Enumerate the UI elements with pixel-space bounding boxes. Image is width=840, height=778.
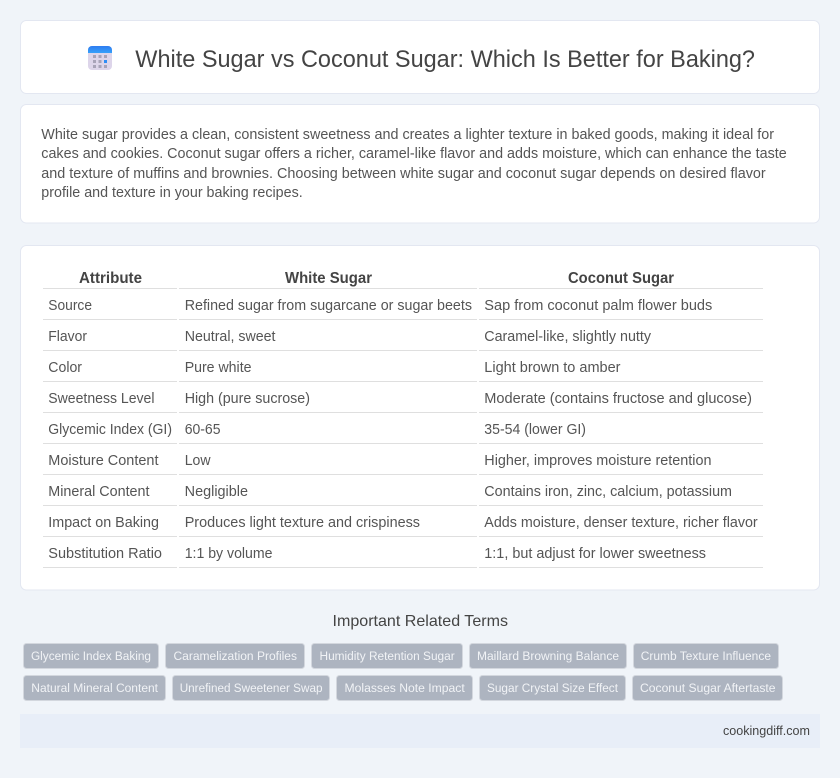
table row: flavor: [48, 329, 652, 345]
text block: introduction paragraph: [41, 127, 787, 201]
table row: impact on baking: Impact on Baking: [48, 515, 159, 531]
tag: unrefined sweetener swap: [172, 676, 330, 700]
table row: source: [48, 298, 712, 314]
table row: sweetness level: Moderate (contains fructose and glucose): [484, 391, 752, 407]
tag: coconut sugar aftertaste: Coconut Sugar Aftertaste: [640, 681, 776, 695]
table header row: Attribute: [79, 270, 142, 287]
table row: color: Color: [48, 360, 82, 376]
table row: substitution ratio: 1:1, but adjust for lower sweetness: [484, 546, 706, 562]
tag: crumb texture influence: Crumb Texture Influence: [641, 649, 771, 663]
table row: impact on baking: Produces light texture and crispiness: [185, 515, 420, 531]
table row: glycemic index: 35-54 (lower GI): [484, 422, 586, 438]
table row: source: Sap from coconut palm flower buds: [484, 298, 712, 314]
heading: important related terms: Important Related Terms: [332, 613, 508, 630]
footer source text: cookingdiff.com: [723, 723, 810, 738]
table row: impact on baking: [48, 515, 758, 531]
panel: related term tags: [24, 644, 782, 700]
tag: humidity retention sugar: [312, 644, 462, 668]
table header row: White Sugar: [285, 270, 372, 287]
text block: introduction paragraph: and texture of muffins and brownies. Choosing between white sugar and coconut sugar depends on desired flavor: [41, 166, 766, 182]
table row: color: [48, 360, 621, 376]
tag: maillard browning balance: Maillard Browning Balance: [477, 649, 619, 663]
table row: substitution ratio: 1:1 by volume: [185, 546, 272, 562]
table row: source: Refined sugar from sugarcane or sugar beets: [185, 298, 472, 314]
table row: glycemic index: 60-65: [185, 422, 220, 438]
tag: glycemic index baking: Glycemic Index Baking: [31, 649, 151, 663]
text block: introduction paragraph: cakes and cookies. Coconut sugar offers a richer, caramel-like flavor and adds moisture, which can enhance the taste: [41, 146, 787, 162]
table row: mineral content: Contains iron, zinc, calcium, potassium: [484, 484, 732, 500]
table row: mineral content: [48, 484, 732, 500]
table row: mineral content: Mineral Content: [48, 484, 149, 500]
tag: coconut sugar aftertaste: [632, 676, 782, 700]
table row: substitution ratio: [48, 546, 706, 562]
table row: moisture content: [48, 453, 712, 469]
icon: calendar: [88, 46, 112, 70]
text block: introduction paragraph: profile and texture in your baking recipes.: [41, 185, 303, 201]
text block: introduction paragraph: White sugar provides a clean, consistent sweetness and creates a lighter texture in baked goods, making it ideal for: [41, 127, 774, 143]
tag: unrefined sweetener swap: Unrefined Sweetener Swap: [180, 681, 323, 695]
table header row: Coconut Sugar: [568, 270, 674, 287]
table row: substitution ratio: Substitution Ratio: [48, 546, 162, 562]
tag: sugar crystal size effect: Sugar Crystal Size Effect: [487, 681, 619, 695]
table row: impact on baking: Adds moisture, denser texture, richer flavor: [484, 515, 758, 531]
table row: sweetness level: Sweetness Level: [48, 391, 154, 407]
panel: comparison table: [20, 246, 820, 590]
table row: sweetness level: High (pure sucrose): [185, 391, 310, 407]
tag: molasses note impact: Molasses Note Impact: [344, 681, 465, 695]
table row: moisture content: Higher, improves moisture retention: [484, 453, 712, 469]
tag: caramelization profiles: Caramelization Profiles: [174, 649, 297, 663]
table row: color: Pure white: [185, 360, 252, 376]
table row: moisture content: Low: [185, 453, 211, 469]
table header row: [79, 270, 674, 287]
panel: introduction: [20, 104, 820, 223]
table row: sweetness level: [48, 391, 752, 407]
tag: caramelization profiles: [166, 644, 304, 668]
tag: humidity retention sugar: Humidity Retention Sugar: [320, 649, 455, 663]
tag: crumb texture influence: [634, 644, 778, 668]
tag: glycemic index baking: [24, 644, 158, 668]
table row: glycemic index: Glycemic Index (GI): [48, 422, 172, 438]
tag: sugar crystal size effect: [480, 676, 626, 700]
table row: moisture content: Moisture Content: [48, 453, 158, 469]
panel: title card: [20, 20, 820, 94]
table row: mineral content: Negligible: [185, 484, 248, 500]
table row: flavor: Neutral, sweet: [185, 329, 276, 345]
table row: glycemic index: [48, 422, 586, 438]
table row: flavor: Caramel-like, slightly nutty: [484, 329, 652, 345]
tag: maillard browning balance: [470, 644, 626, 668]
footer bar: [20, 714, 820, 748]
table row: flavor: Flavor: [48, 329, 87, 345]
tag: natural mineral content: Natural Mineral Content: [31, 681, 159, 695]
title: White Sugar vs Coconut Sugar: Which Is Better for Baking?: [135, 46, 755, 73]
tag: natural mineral content: [24, 676, 166, 700]
tag: molasses note impact: [336, 676, 472, 700]
table row: color: Light brown to amber: [484, 360, 621, 376]
table row: source: Source: [48, 298, 92, 314]
